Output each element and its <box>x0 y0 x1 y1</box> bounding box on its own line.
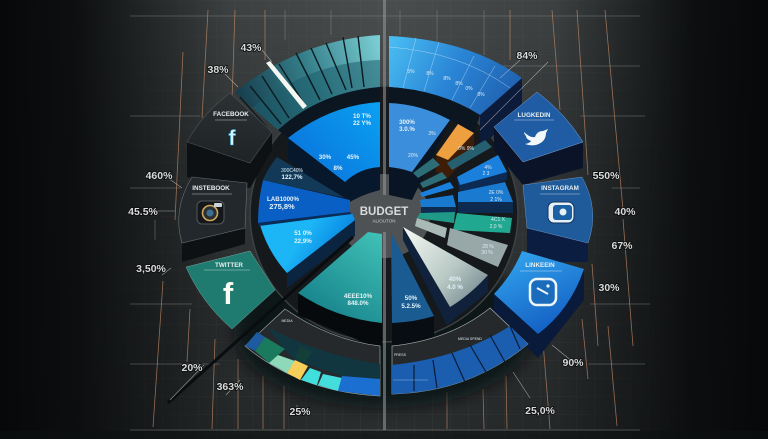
percentage labels with leader lines: 20% <box>181 362 203 374</box>
panel: bottom-left band: MEDIA <box>281 319 293 323</box>
panel: Facebook <box>187 93 272 188</box>
right-hand small slices: 2 1% <box>490 197 502 203</box>
panel: top-right blue slice: 3% <box>428 131 436 137</box>
panel: top-left blue slice: 45% <box>347 154 360 161</box>
percentage labels with leader lines: 90% <box>562 357 584 369</box>
icon: bird <box>524 129 548 145</box>
drop shadow under chart <box>234 252 534 408</box>
panel: bottom-left band <box>245 309 380 396</box>
panel: top-left blue slice: 30% <box>319 154 332 161</box>
panel: large teal slice <box>298 232 382 350</box>
panel: dark blue slice: 5.2.5% <box>401 303 421 310</box>
divider: vertical bar <box>383 0 386 430</box>
percentage labels with leader lines: 45.5% <box>128 206 159 218</box>
percentage labels with leader lines: 40% <box>614 206 636 218</box>
percentage labels with leader lines: 67% <box>611 240 633 252</box>
panel: top-right segmented band: 0% <box>465 86 473 92</box>
right-hand small slices: 28 % <box>482 244 494 250</box>
panel: dark blue slice <box>391 232 434 350</box>
panel: top-right segmented band: 5% <box>407 69 415 75</box>
percentage labels with leader lines: 84% <box>516 50 538 62</box>
icon: rounded square <box>530 279 556 305</box>
pie base ring <box>250 86 518 342</box>
percentage labels with leader lines: 363% <box>217 381 244 393</box>
right-hand small slices: 2 3 <box>483 171 490 177</box>
percentage labels with leader lines: 3,50% <box>136 263 167 275</box>
percentage labels with leader lines <box>128 42 636 418</box>
panel: top-right blue slice: 3.0.% <box>399 126 415 133</box>
panel: top-left blue slice: 22 Y% <box>353 120 372 127</box>
panel: top-left blue slice <box>288 102 380 205</box>
icon: f: f <box>223 276 234 311</box>
right-hand small slices: 2E 0% <box>489 190 504 196</box>
panel: Instebook <box>179 177 247 262</box>
panel: light-blue slice: 22,9% <box>294 238 312 245</box>
percentage labels with leader lines: 30% <box>598 282 620 294</box>
panel: Twitter <box>186 251 275 329</box>
percentage labels with leader lines: 25% <box>289 406 311 418</box>
panel: bottom-right band: PRESS <box>394 353 407 357</box>
panel: Instagram: INSTAGRAM <box>541 185 579 192</box>
right-hand small slices: 4C1 X <box>491 217 506 223</box>
panel: top-right blue slice <box>389 103 450 200</box>
panel: top-left segmented band <box>235 35 380 133</box>
right-hand small slices <box>413 140 513 267</box>
panel: white slice <box>403 227 488 325</box>
divider: diagonal bar <box>168 237 353 403</box>
centre disk <box>338 174 430 258</box>
panel: Twitter: TWITTER <box>215 262 243 269</box>
icon: f: f <box>228 127 236 150</box>
panel: royal-blue slice: 275,8% <box>269 202 295 211</box>
panel: top-right blue slice: 300% <box>399 119 415 126</box>
white highlight stripe <box>266 61 307 109</box>
panel: dark slate slice: 122,7% <box>282 174 303 181</box>
centre title: ALIOUTON <box>373 218 395 224</box>
orange slice <box>436 124 474 178</box>
panel: Instebook: INSTEBOOK <box>192 185 230 192</box>
panel: top-left blue slice: 8% <box>334 165 343 172</box>
panel: top-right segmented band: 8% <box>455 81 463 87</box>
panel: Linkeein <box>494 251 584 358</box>
percentage labels with leader lines: 25,0% <box>525 405 556 417</box>
panel: Instagram <box>523 177 593 262</box>
panel: light-blue slice <box>260 213 355 288</box>
panel: bottom-right band: MEDIA SPEND <box>458 337 482 341</box>
panel: top-right blue slice: 20% <box>408 153 419 159</box>
panel: royal-blue slice: LAB1000% <box>267 196 299 203</box>
percentage labels with leader lines: 460% <box>146 170 173 182</box>
panel: dark blue slice: 50% <box>405 295 418 302</box>
panel: dark slate slice <box>263 157 345 198</box>
icon: camera <box>197 201 224 224</box>
icon: camera <box>548 202 574 223</box>
panel: Linkeein: LINKEEIN <box>525 262 555 269</box>
panel: large teal slice: 4EEE10% <box>344 293 373 300</box>
panel: royal-blue slice <box>258 180 352 226</box>
centre title <box>360 206 408 224</box>
percentage labels with leader lines: 38% <box>207 64 229 76</box>
panel: top-right segmented band: 8% <box>426 71 434 77</box>
right-hand small slices: 0% 9% <box>458 146 474 152</box>
panel: large teal slice: 848.0% <box>348 300 369 307</box>
right-hand small slices: 2,0 % <box>490 224 503 230</box>
panel: light-blue slice: 51 0% <box>294 230 312 237</box>
percentage labels with leader lines: 43% <box>240 42 262 54</box>
right-hand small slices: 4% <box>484 165 492 171</box>
panel: top-right segmented band <box>389 36 522 147</box>
panel: white slice: 40% <box>449 276 462 283</box>
panel: Facebook: FACEBOOK <box>213 111 249 118</box>
right-hand small slices: 30 % <box>481 250 493 256</box>
panel: top-right segmented band: 8% <box>477 92 485 98</box>
panel: Lugkedin: LUGKEDIN <box>518 112 551 119</box>
panel: Lugkedin <box>494 92 583 185</box>
panel: dark slate slice: 300C40% <box>281 168 304 174</box>
panel: top-right segmented band: 8% <box>443 76 451 82</box>
panel: top-left blue slice: 10 T% <box>353 113 371 120</box>
panel: bottom-right band <box>392 308 528 394</box>
percentage labels with leader lines: 550% <box>593 170 620 182</box>
centre title: BUDGET <box>360 206 408 218</box>
panel: white slice: 4.0 % <box>447 284 463 291</box>
dark arc under bands <box>278 87 480 138</box>
